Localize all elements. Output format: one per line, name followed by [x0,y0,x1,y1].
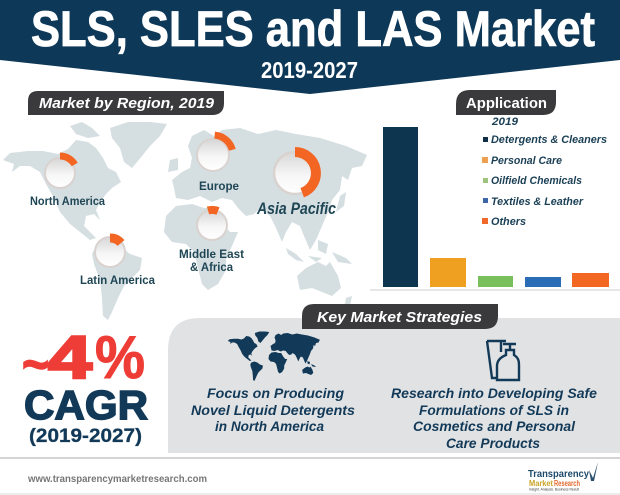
icon: world map [228,332,320,381]
heading: application [456,90,556,115]
label: middle east and africa: Middle East [179,247,244,261]
legend: application 2019: 2019 [491,116,519,128]
text: research into developing: Cosmetics and Personal [413,418,576,434]
header banner: 2019-2027 [261,57,358,83]
heading: key market strategies: Key Market Strategies [317,309,482,326]
logo: transparency market research: Insight. Analysis. Business Result [529,488,579,492]
legend: application 2019: Detergents & Cleaners [491,134,607,146]
logo: transparency market research: Market [529,479,553,488]
icon: cosmetic bottle and tube [487,341,519,380]
callout: cagr: CAGR [24,382,148,428]
legend: application 2019: Textiles & Leather [491,196,584,208]
heading: application: Application [466,95,547,112]
text: focus on producing: Novel Liquid Detergents [191,402,355,418]
donut: north america [45,156,75,188]
text: research into developing: Care Products [446,435,540,451]
text: research into developing: Research into Developing Safe [391,385,597,401]
label: latin america: Latin America [80,273,155,287]
label: north america: North America [30,194,105,208]
text: research into developing [391,385,597,451]
legend: application 2019: Oilfield Chemicals [491,175,582,187]
logo: transparency market research: Research [554,479,580,488]
world map: regional market [3,122,367,320]
text: research into developing: Formulations of SLS in [419,402,569,418]
callout: cagr [22,324,148,447]
legend: application 2019: Others [491,216,526,228]
label: middle east and africa [179,247,244,274]
label: asia pacific: Asia Pacific [256,199,336,218]
heading: market by region: Market by Region, 2019 [39,95,215,112]
footer url: www.transparencymarketresearch.com [27,473,207,485]
logo: transparency market research [528,462,598,492]
callout: cagr: % [95,324,145,391]
donut: europe [197,135,232,171]
logo: transparency market research: Transparency [528,468,589,480]
text: focus on producing: Focus on Producing [207,385,344,401]
panel: key market strategies [168,318,620,453]
heading: key market strategies [302,304,498,329]
label: middle east and africa: & Africa [190,260,233,274]
bar chart: application [383,127,609,287]
heading: market by region [28,91,224,115]
donut: middle east and africa [197,210,227,240]
callout: cagr: (2019-2027) [29,426,142,447]
label: europe: Europe [199,179,239,193]
callout: cagr: ~ [22,332,49,395]
donut: latin america [95,237,125,267]
donut: asia pacific [274,152,316,194]
legend: application 2019 [482,116,607,228]
callout: cagr: 4 [48,324,93,391]
text: focus on producing [191,385,355,434]
header banner [0,0,620,94]
text: focus on producing: in North America [215,418,324,434]
legend: application 2019: Personal Care [491,155,562,167]
